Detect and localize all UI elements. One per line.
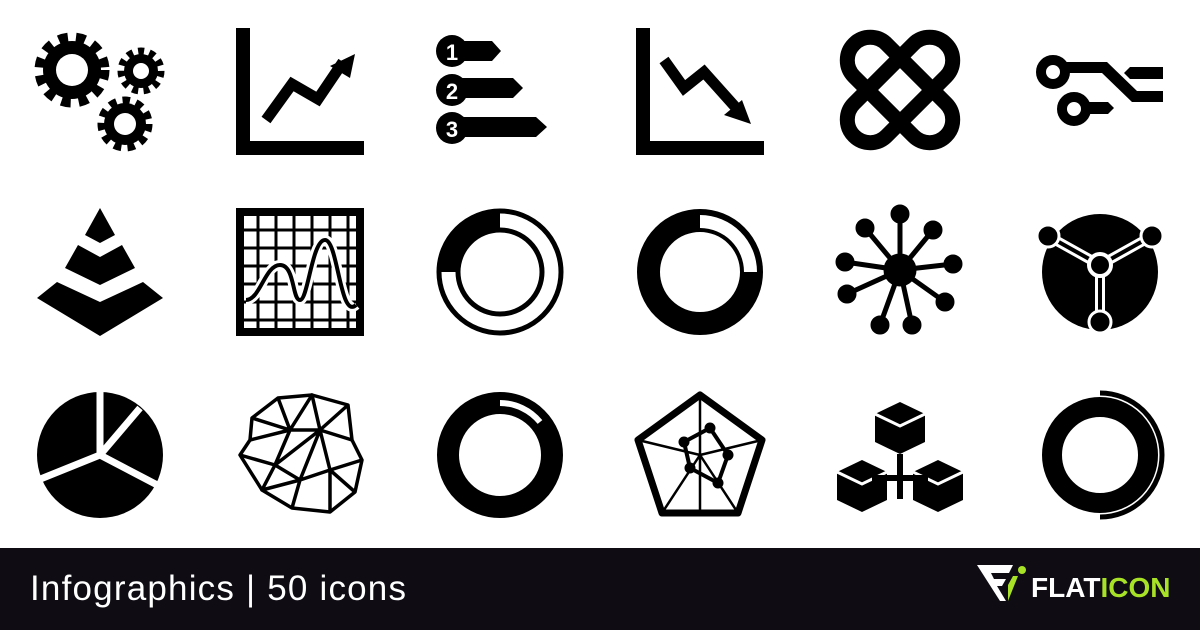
icon: mesh bbox=[240, 395, 362, 512]
icon: numbered list: 2 bbox=[446, 79, 458, 104]
logo: flaticon: FLATICON bbox=[1031, 572, 1170, 603]
icon: gears bbox=[39, 37, 161, 148]
icon: donut 1 bbox=[437, 209, 561, 333]
icon: radar pentagon bbox=[638, 395, 762, 513]
icon: circuit bbox=[1041, 60, 1163, 121]
icon: tri-node bbox=[1037, 214, 1163, 333]
icon: chart down bbox=[636, 28, 764, 155]
icon: starburst network bbox=[838, 207, 960, 332]
icon: cross link bbox=[838, 28, 962, 152]
icon: cubes bbox=[837, 402, 963, 512]
footer bar bbox=[0, 548, 1200, 630]
icon: donut 3 bbox=[448, 403, 552, 507]
icon: pyramid bbox=[37, 208, 163, 336]
icon: numbered list: 3 bbox=[446, 117, 458, 142]
logo: flaticon bbox=[977, 565, 1170, 603]
icon: numbered list bbox=[436, 35, 547, 144]
icon: donut 4 bbox=[1052, 393, 1162, 517]
icon: chart up bbox=[236, 28, 364, 155]
icon: donut 2 bbox=[648, 215, 757, 324]
icon: numbered list: 1 bbox=[446, 40, 458, 65]
icon: pie chart bbox=[37, 390, 163, 518]
icon: grid chart bbox=[240, 212, 360, 332]
footer title: Infographics | 50 icons bbox=[30, 569, 407, 608]
